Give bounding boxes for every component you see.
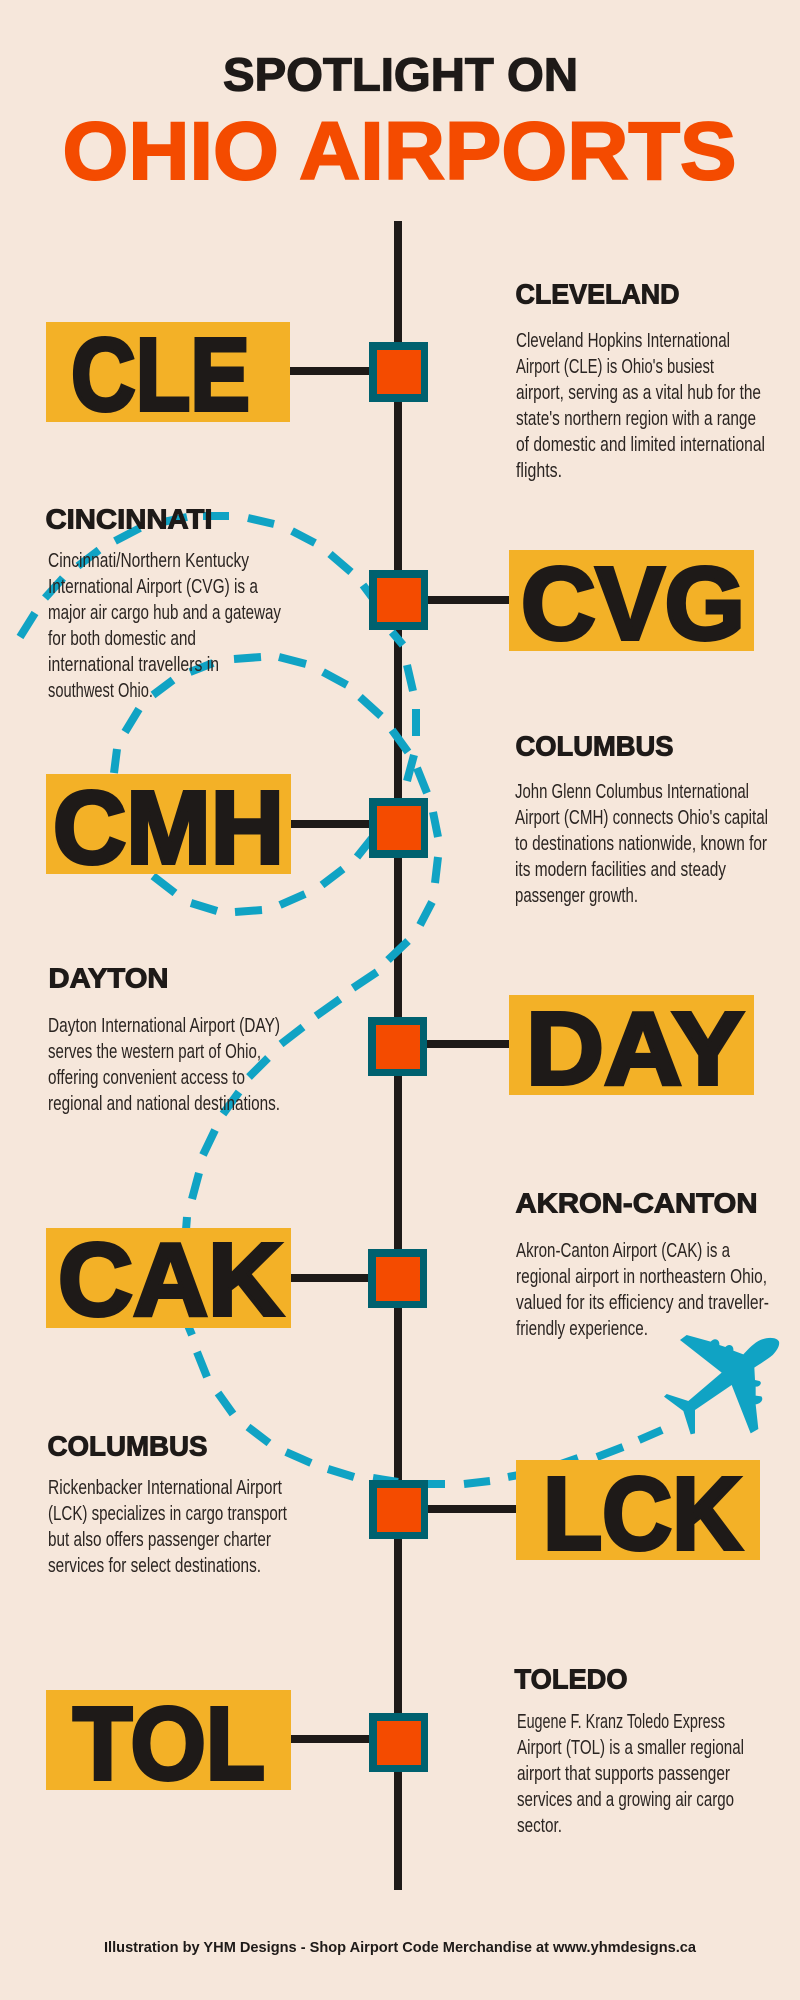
text: Cincinnati description xyxy=(48,550,281,702)
marker: CAK xyxy=(368,1249,427,1308)
text: Toledo description: sector. xyxy=(517,1815,562,1837)
connector: TOL xyxy=(290,1735,370,1743)
marker: CLE xyxy=(369,342,428,402)
text: Toledo description: airport that supports passenger xyxy=(517,1763,730,1785)
panel: Cincinnati xyxy=(46,504,754,702)
title: OHIO AIRPORTS xyxy=(62,106,736,197)
text: Toledo description xyxy=(517,1711,744,1837)
title: SPOTLIGHT ON xyxy=(223,48,578,100)
text: Columbus description: its modern facilities and steady xyxy=(515,859,726,881)
dashed flight route xyxy=(20,516,662,1484)
panel: Columbus CMH xyxy=(46,730,768,907)
connector: CAK xyxy=(291,1274,369,1282)
heading: Cincinnati: CINCINNATI xyxy=(46,504,212,534)
text: Dayton description xyxy=(48,1015,280,1115)
panel: Cleveland xyxy=(46,278,765,482)
panel: Dayton xyxy=(48,962,754,1115)
heading: Columbus: COLUMBUS xyxy=(516,730,674,762)
text: Cleveland description: Airport (CLE) is Ohio's busiest xyxy=(516,356,714,378)
footer credit: Illustration by YHM Designs - Shop Airport Code Merchandise at www.yhmdesigns.ca xyxy=(104,1939,697,1956)
timeline spine xyxy=(394,221,402,1890)
heading: Columbus: COLUMBUS xyxy=(48,1430,208,1462)
heading: Toledo: TOLEDO xyxy=(514,1664,628,1694)
text: Cleveland description: flights. xyxy=(516,460,562,482)
text: Dayton description: regional and national destinations. xyxy=(48,1093,280,1115)
connector: DAY xyxy=(427,1040,510,1048)
text: Rickenbacker description: but also offers passenger charter xyxy=(48,1529,271,1551)
text: Cincinnati description: international travellers in xyxy=(48,654,219,676)
panel: Toledo xyxy=(46,1664,744,1837)
text: Dayton description: offering convenient access to xyxy=(48,1067,245,1089)
heading: Dayton: DAYTON xyxy=(48,962,168,994)
title xyxy=(62,48,736,197)
text: Toledo description: Eugene F. Kranz Toledo Express xyxy=(517,1711,725,1733)
text: Rickenbacker description xyxy=(48,1477,287,1577)
heading: Akron-Canton: AKRON-CANTON xyxy=(516,1188,758,1218)
icon: airplane xyxy=(664,1335,779,1434)
text: Akron-Canton description: Akron-Canton Airport (CAK) is a xyxy=(516,1240,731,1262)
connector: CLE xyxy=(290,367,370,375)
marker: TOL xyxy=(369,1713,428,1772)
code box: CAK: CAK xyxy=(58,1222,283,1337)
code box: DAY: DAY xyxy=(526,991,744,1106)
marker: CVG xyxy=(369,570,428,630)
text: Columbus description xyxy=(515,781,768,907)
connector: CVG xyxy=(427,596,510,604)
marker: CMH xyxy=(369,798,428,858)
panel: Columbus LCK xyxy=(48,1430,760,1577)
text: Akron-Canton description xyxy=(516,1240,769,1340)
text: Cleveland description xyxy=(516,330,765,482)
text: Cincinnati description: International Airport (CVG) is a xyxy=(48,576,259,598)
code box: TOL: TOL xyxy=(73,1686,265,1801)
text: Cincinnati description: for both domestic and xyxy=(48,628,196,650)
text: Rickenbacker description: (LCK) specializes in cargo transport xyxy=(48,1503,287,1525)
text: Akron-Canton description: friendly experience. xyxy=(516,1318,648,1340)
text: Dayton description: Dayton International Airport (DAY) xyxy=(48,1015,280,1037)
code box: CVG: CVG xyxy=(521,546,745,661)
connector: LCK xyxy=(428,1505,517,1513)
text: Toledo description: services and a growing air cargo xyxy=(517,1789,734,1811)
heading: Cleveland: CLEVELAND xyxy=(516,278,680,310)
text: Columbus description: passenger growth. xyxy=(515,885,638,907)
code box: CMH: CMH xyxy=(53,770,284,885)
code box: CLE: CLE xyxy=(71,317,250,432)
text: Rickenbacker description: services for select destinations. xyxy=(48,1555,261,1577)
marker: LCK xyxy=(369,1480,428,1539)
text: Rickenbacker description: Rickenbacker International Airport xyxy=(48,1477,282,1499)
text: Dayton description: serves the western part of Ohio, xyxy=(48,1041,261,1063)
text: Cincinnati description: major air cargo hub and a gateway xyxy=(48,602,281,624)
marker: DAY xyxy=(368,1017,427,1076)
panel: Akron-Canton xyxy=(46,1188,769,1340)
text: Cleveland description: Cleveland Hopkins International xyxy=(516,330,730,352)
code box: LCK: LCK xyxy=(543,1456,742,1571)
text: Cincinnati description: Cincinnati/Northern Kentucky xyxy=(48,550,249,572)
connector: CMH xyxy=(291,820,370,828)
text: Cincinnati description: southwest Ohio. xyxy=(48,680,153,702)
